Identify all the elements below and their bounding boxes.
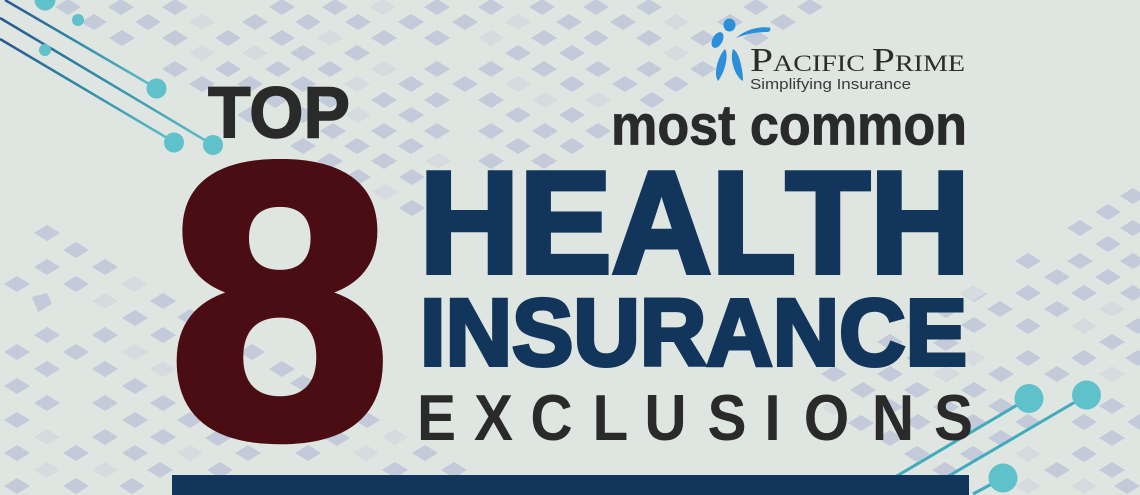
diamond: tilted fragment xyxy=(32,293,52,312)
heading: INSURANCE: INSURANCE xyxy=(420,280,967,386)
icon: figure xyxy=(709,18,770,81)
navy footer bar xyxy=(172,475,969,495)
logo: Pacific Prime xyxy=(709,18,965,93)
heading: EXCLUSIONS: EXCLUSIONS xyxy=(417,382,973,455)
decorative circuit lines: bottom right xyxy=(885,380,1101,494)
heading: TOP: TOP xyxy=(208,73,350,153)
heading: most common: most common xyxy=(611,94,967,158)
heading: HEALTH: HEALTH xyxy=(420,142,970,304)
logo tagline: Simplifying Insurance xyxy=(750,77,911,93)
decorative circuit lines: top left xyxy=(0,0,223,155)
logo wordmark: PACIFIC PRIME xyxy=(750,42,965,79)
